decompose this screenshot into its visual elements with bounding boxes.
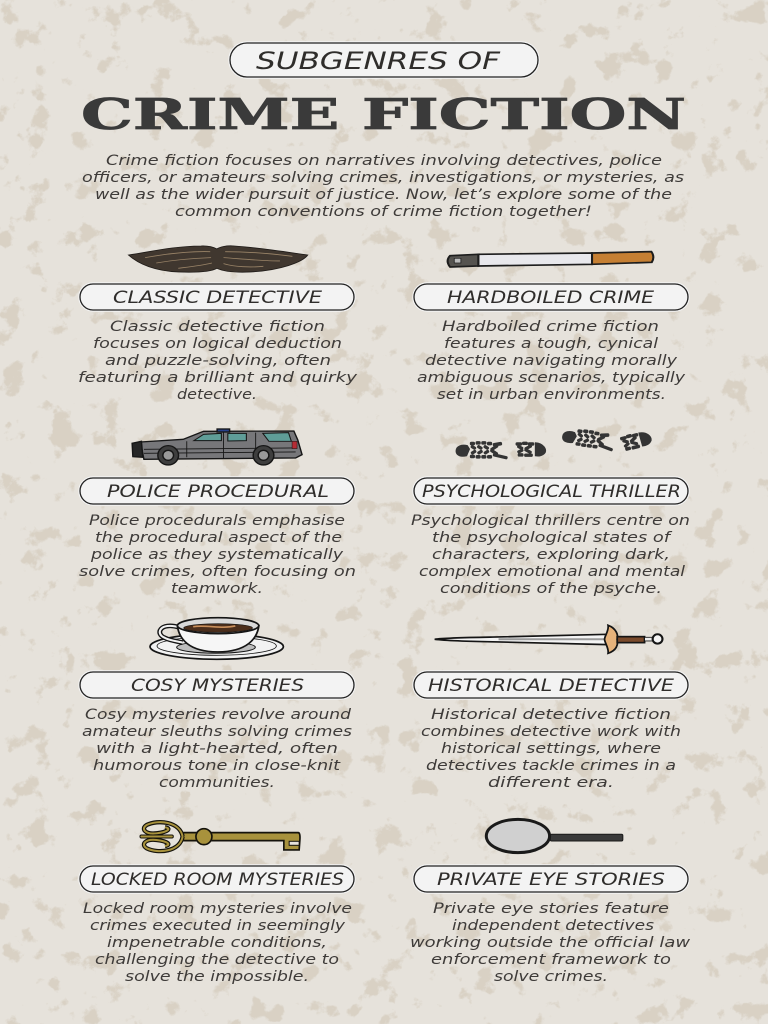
description: cosy mysteries: with a light-hearted, often — [96, 741, 338, 757]
description: locked room mysteries — [83, 901, 352, 985]
description: locked room mysteries: solve the impossible. — [125, 969, 309, 985]
description: cosy mysteries: amateur sleuths solving crimes — [82, 724, 352, 740]
description: police procedural: the procedural aspect of the — [95, 530, 342, 546]
description: hardboiled crime: ambiguous scenarios, typically — [417, 370, 686, 386]
description: locked room mysteries: Locked room mysteries involve — [83, 901, 352, 917]
description: police procedural: Police procedurals emphasise — [89, 513, 345, 529]
panel: historical detective — [414, 625, 688, 791]
intro paragraph: common conventions of crime fiction together! — [175, 204, 592, 220]
description: historical detective — [421, 707, 681, 791]
description: private eye stories — [410, 901, 691, 985]
label pill: private eye stories: PRIVATE EYE STORIES — [437, 870, 665, 890]
intro paragraph: well as the wider pursuit of justice. Now, let’s explore some of the — [95, 187, 672, 203]
description: locked room mysteries: impenetrable conditions, — [107, 935, 327, 951]
label pill: locked room mysteries: LOCKED ROOM MYSTERIES — [91, 870, 344, 890]
intro paragraph — [82, 153, 684, 220]
description: private eye stories: working outside the official law — [410, 935, 691, 951]
description: psychological thriller: conditions of the psyche. — [440, 581, 662, 597]
label pill: private eye stories — [414, 866, 688, 892]
description: psychological thriller: the psychological states of — [432, 530, 673, 546]
label pill: police procedural: POLICE PROCEDURAL — [107, 482, 329, 502]
description: historical detective: historical settings, where — [441, 741, 661, 757]
icon: footprints — [456, 427, 653, 459]
description: police procedural: police as they systematically — [90, 547, 344, 563]
panel: classic detective — [78, 246, 358, 403]
icon: cigarette — [448, 252, 653, 267]
description: hardboiled crime: Hardboiled crime fiction — [442, 319, 659, 335]
label pill: historical detective — [414, 672, 688, 698]
icon: moustache — [128, 246, 308, 272]
header pill: subgenres of: SUBGENRES OF — [256, 47, 502, 75]
label pill: classic detective — [80, 284, 354, 310]
description: historical detective: Historical detective fiction — [431, 707, 671, 723]
description: psychological thriller: characters, exploring dark, — [432, 547, 670, 563]
intro paragraph: officers, or amateurs solving crimes, investigations, or mysteries, as — [82, 170, 684, 186]
panel: psychological thriller — [411, 427, 690, 597]
description: private eye stories: enforcement framework to — [431, 952, 671, 968]
description: classic detective: Classic detective fiction — [110, 319, 325, 335]
icon: teacup and saucer — [150, 618, 283, 659]
description: historical detective: detectives tackle crimes in a — [426, 758, 676, 774]
label pill: cosy mysteries: COSY MYSTERIES — [131, 676, 304, 696]
description: classic detective — [78, 319, 358, 403]
description: private eye stories: Private eye stories feature — [433, 901, 669, 917]
label pill: historical detective: HISTORICAL DETECTIVE — [428, 676, 674, 696]
description: psychological thriller: Psychological thrillers centre on — [411, 513, 690, 529]
description: hardboiled crime: features a tough, cynical — [444, 336, 658, 352]
description: hardboiled crime: set in urban environments. — [437, 387, 666, 403]
icon: sword — [435, 625, 662, 653]
description: locked room mysteries: crimes executed in seemingly — [90, 918, 346, 934]
description: police procedural: teamwork. — [171, 581, 263, 597]
description: psychological thriller — [411, 513, 690, 597]
description: psychological thriller: complex emotional and mental — [419, 564, 685, 580]
header pill: subgenres of — [230, 43, 538, 77]
description: historical detective: different era. — [488, 775, 614, 791]
panel: police procedural — [79, 429, 356, 597]
panel: cosy mysteries — [80, 618, 354, 791]
description: hardboiled crime: detective navigating morally — [425, 353, 678, 369]
description: police procedural — [79, 513, 356, 597]
panel: private eye stories — [410, 819, 691, 985]
label pill: hardboiled crime: HARDBOILED CRIME — [447, 288, 654, 308]
panel: hardboiled crime — [414, 252, 688, 403]
description: locked room mysteries: challenging the detective to — [95, 952, 339, 968]
label pill: locked room mysteries — [80, 866, 354, 892]
label pill: cosy mysteries — [80, 672, 354, 698]
label pill: classic detective: CLASSIC DETECTIVE — [113, 288, 322, 308]
description: cosy mysteries: communities. — [159, 775, 275, 791]
intro paragraph: Crime fiction focuses on narratives involving detectives, police — [106, 153, 662, 169]
description: police procedural: solve crimes, often focusing on — [79, 564, 356, 580]
label pill: psychological thriller — [414, 478, 688, 504]
description: cosy mysteries: Cosy mysteries revolve around — [85, 707, 351, 723]
description: hardboiled crime — [417, 319, 686, 403]
icon: ornate key — [140, 822, 300, 851]
title: CRIME FICTION — [81, 90, 686, 139]
icon: police car — [132, 429, 302, 465]
label pill: psychological thriller: PSYCHOLOGICAL THRILLER — [422, 482, 681, 502]
description: cosy mysteries — [82, 707, 352, 791]
panel: locked room mysteries — [80, 822, 354, 985]
description: private eye stories: independent detectives — [452, 918, 654, 934]
icon: magnifying glass — [486, 819, 623, 853]
label pill: police procedural — [80, 478, 354, 504]
description: classic detective: and puzzle-solving, often — [105, 353, 331, 369]
description: classic detective: featuring a brilliant and quirky — [78, 370, 358, 386]
label pill: hardboiled crime — [414, 284, 688, 310]
description: classic detective: focuses on logical deduction — [93, 336, 342, 352]
description: classic detective: detective. — [177, 387, 257, 403]
description: private eye stories: solve crimes. — [494, 969, 608, 985]
description: cosy mysteries: humorous tone in close-knit — [93, 758, 341, 774]
description: historical detective: combines detective work with — [421, 724, 681, 740]
